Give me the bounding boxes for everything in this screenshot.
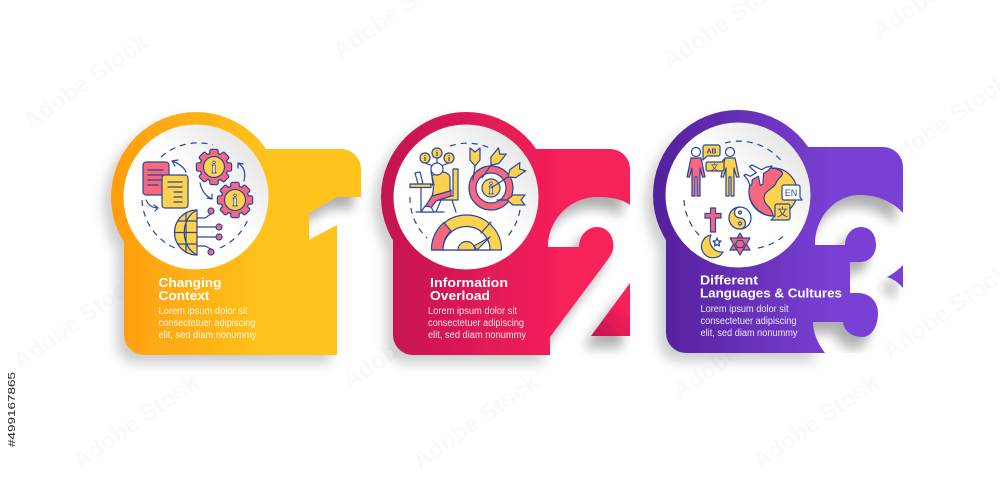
heading: Context bbox=[158, 288, 210, 303]
icon: globe with plane and speech bubbles: EN bbox=[785, 188, 797, 198]
icon: gear one bbox=[197, 150, 231, 184]
icon: gear two: i bbox=[233, 191, 238, 210]
icon: overwhelmed person: i bbox=[436, 149, 439, 158]
panel: information overload bbox=[381, 112, 630, 369]
icon: speed gauge bbox=[431, 215, 502, 250]
card with numeral 1 bbox=[111, 112, 361, 355]
body text: elit, sed diam nonummy bbox=[700, 328, 798, 339]
card with numeral 2 bbox=[381, 112, 630, 355]
card with numeral 3 bbox=[653, 110, 903, 353]
watermark: Adobe Stock bbox=[668, 298, 804, 405]
icon: gear two bbox=[218, 183, 252, 217]
heading: Different bbox=[700, 272, 759, 288]
numeral 1 cast shadow bbox=[309, 197, 357, 227]
icon: gear one: i bbox=[212, 158, 217, 177]
panel: changing context bbox=[111, 112, 361, 369]
watermark: Adobe Stock bbox=[68, 368, 204, 475]
heading bbox=[430, 275, 508, 303]
icon: network globe bbox=[174, 208, 222, 255]
dashed ring bbox=[142, 143, 249, 248]
dashed ring bbox=[410, 143, 520, 238]
icon: crescent and star bbox=[701, 235, 723, 258]
watermark: Adobe Stock bbox=[8, 268, 144, 375]
heading: Information bbox=[430, 275, 508, 290]
icon: yin yang bbox=[729, 207, 751, 229]
body text bbox=[700, 304, 798, 339]
heading: Overload bbox=[430, 288, 490, 303]
body text: Lorem ipsum dolor sit bbox=[700, 304, 789, 315]
icon: cross bbox=[705, 208, 721, 232]
white circle bbox=[666, 122, 810, 268]
icon: overwhelmed person bbox=[410, 148, 458, 212]
body text bbox=[428, 306, 526, 341]
heading: Changing bbox=[158, 275, 222, 290]
white circle bbox=[394, 124, 538, 270]
heading bbox=[700, 272, 842, 300]
white circle bbox=[124, 124, 268, 270]
icon: globe with plane and speech bubbles: 文 bbox=[777, 205, 788, 219]
infographic canvas bbox=[8, 110, 903, 447]
watermark: Adobe Stock bbox=[408, 368, 544, 475]
icon: overwhelmed person: i bbox=[448, 154, 451, 163]
panel: different languages and cultures bbox=[653, 110, 903, 367]
body text: consectetuer adipiscing bbox=[158, 318, 256, 329]
stock image id: #499167865 bbox=[7, 371, 18, 447]
icon: overwhelmed person: i bbox=[424, 154, 427, 163]
numeral 3 cast shadow bbox=[813, 195, 899, 353]
body text: Lorem ipsum dolor sit bbox=[428, 306, 517, 317]
body text: consectetuer adipiscing bbox=[428, 318, 524, 329]
body text: elit, sed diam nonummy bbox=[158, 330, 256, 341]
icon: documents bbox=[143, 162, 188, 208]
icon: two people talking: 文 bbox=[710, 162, 718, 172]
watermark: Adobe Stock bbox=[18, 28, 154, 135]
watermark: Adobe Stock bbox=[338, 288, 474, 395]
icon: target with arrows bbox=[469, 148, 526, 210]
body text bbox=[158, 306, 256, 341]
body text: elit, sed diam nonummy bbox=[428, 330, 526, 341]
icon: two people talking: AB bbox=[706, 148, 717, 156]
icon: star of david bbox=[730, 233, 750, 255]
watermark: Adobe Stock bbox=[748, 368, 884, 475]
heading: Languages & Cultures bbox=[700, 286, 842, 300]
icon: two people talking bbox=[687, 145, 739, 196]
heading bbox=[158, 275, 222, 303]
icon: globe with plane and speech bubbles bbox=[742, 156, 802, 220]
icon: target with arrows: i bbox=[489, 179, 494, 198]
dashed ring bbox=[684, 141, 787, 248]
numeral 2 cast shadow bbox=[550, 197, 626, 354]
body text: consectetuer adipiscing bbox=[700, 316, 796, 327]
body text: Lorem ipsum dolor sit bbox=[158, 306, 248, 317]
icon: cycle arrows bbox=[146, 160, 245, 211]
